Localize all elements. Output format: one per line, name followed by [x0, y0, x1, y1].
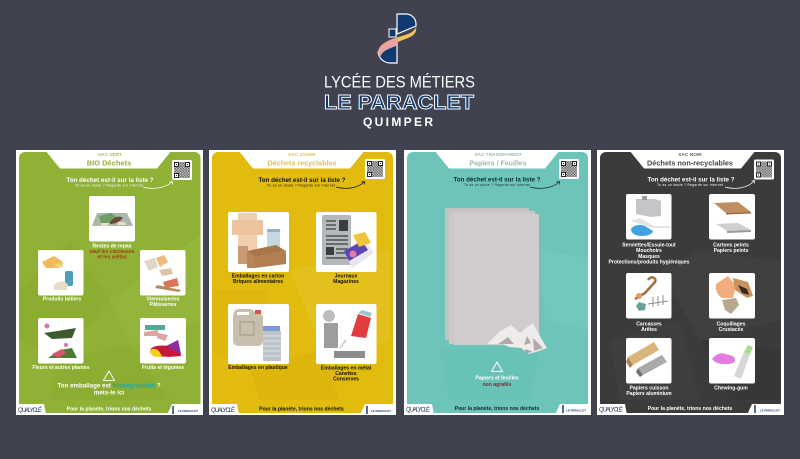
logo text: Lycée des Métiers: LYCÉE DES MÉTIERS — [324, 72, 475, 92]
panel: sac jaune — [209, 150, 396, 415]
header label: SAC TRANSPARENT — [474, 152, 522, 158]
logo text: Quimper: QUIMPER — [363, 115, 433, 129]
item: emballages en plastique — [228, 304, 289, 364]
hint: Tu as un doute ? Regarde sur internet — [75, 184, 143, 188]
header tab — [434, 150, 560, 168]
background polygons — [440, 250, 588, 400]
hint: Tu as un doute ? Regarde sur internet — [267, 184, 335, 188]
logo text: Le Paraclet: LE PARACLET — [324, 92, 474, 114]
footer: QUALYCLÉ — [18, 407, 42, 414]
label: carcasses: Arêtes — [641, 327, 657, 333]
label: fleurs et plantes: Fleurs et autres plantes — [32, 365, 90, 371]
footer: QUALYCLÉ — [211, 407, 235, 414]
footer: LE PARACLET — [371, 409, 391, 413]
warning message: non agrafés — [483, 382, 512, 388]
footer: Pour la planète, trions nos déchets — [455, 406, 539, 412]
footer: LE PARACLET — [178, 409, 198, 413]
warning message — [475, 376, 519, 388]
item: fruits et légumes — [140, 318, 186, 364]
item: serviettes — [626, 194, 672, 240]
footer: QUALYCLÉ — [406, 406, 430, 414]
header label: SAC VERT — [98, 152, 122, 158]
panel: sac transparent — [404, 150, 591, 415]
footer: Pour la planète, trions nos déchets — [259, 406, 344, 412]
footer: Pour la planète, trions nos déchets — [648, 406, 732, 412]
label: serviettes: Serviettes/Essuie-tout — [622, 242, 676, 248]
item: produits laitiers — [38, 250, 84, 296]
QR code — [172, 160, 192, 180]
icon: warning triangle — [492, 362, 502, 372]
label: cartons peints — [713, 242, 749, 254]
footer: QUALYCLÉ — [599, 406, 623, 414]
header tab — [629, 150, 756, 168]
footer — [597, 404, 784, 415]
label: produits laitiers: Produits laitiers — [43, 296, 81, 302]
icon: warning triangle — [104, 371, 114, 380]
panel: sac vert — [16, 150, 203, 415]
header title: BIO Déchets — [87, 158, 131, 168]
label: emballages en carton: Briques alimentaires — [233, 279, 283, 285]
label: coquillages: Crustacés — [719, 327, 743, 333]
QR code — [365, 159, 385, 179]
logo mark: letter P ribbon — [378, 14, 416, 63]
icon: crumpled paper — [487, 323, 547, 354]
question: Ton déchet est-il sur la liste ? — [648, 176, 735, 184]
label: emballages en plastique: Emballages en plastique — [228, 365, 288, 371]
label: restes de repas — [89, 244, 135, 260]
QR code — [754, 160, 774, 180]
item: fleurs et plantes — [38, 318, 84, 364]
item: carcasses — [626, 273, 672, 318]
item: papiers cuisson — [626, 338, 672, 384]
question: Ton déchet est-il sur la liste ? — [66, 177, 154, 184]
label: chewing-gum: Chewing-gum — [714, 386, 748, 392]
label: emballages en carton — [232, 274, 284, 285]
question: Ton déchet est-il sur la liste ? — [454, 176, 541, 184]
item: viennoiseries — [140, 250, 186, 296]
label: emballages en carton: Emballages en carton — [232, 274, 284, 280]
label: carcasses: Carcasses — [636, 322, 662, 328]
label: emballages en métal: Canettes — [335, 371, 357, 377]
footer: Pour la planète, trions nos déchets — [67, 406, 151, 412]
header tab — [45, 150, 172, 168]
item: restes de repas — [89, 196, 135, 242]
label: journaux — [333, 274, 359, 285]
label: serviettes: Protections/produits hygiéniques — [609, 260, 690, 266]
background polygons — [610, 250, 781, 400]
header title: Papiers / Feuilles — [469, 160, 527, 168]
header title: Déchets non-recyclables — [647, 158, 733, 168]
label: cartons peints: Papiers peints — [714, 248, 749, 254]
item: cartons peints — [709, 194, 755, 240]
biodegradable message — [57, 382, 161, 396]
header title: Déchets recyclables — [267, 158, 337, 168]
arrow — [530, 182, 560, 188]
footer: LE PARACLET — [760, 408, 780, 412]
label: serviettes: Mouchoirs — [636, 248, 662, 254]
label: emballages en métal: Emballages en métal — [321, 366, 372, 372]
label: coquillages: Coquillages — [717, 322, 746, 328]
biodegradable message: Ton emballage est biodégradable ? — [57, 382, 161, 390]
arrow — [725, 180, 754, 188]
label: restes de repas: et les arêtes — [97, 254, 127, 260]
item: emballages en carton — [228, 212, 289, 272]
icon: paper sheets — [445, 208, 539, 345]
footer: LE PARACLET — [566, 408, 586, 412]
warning message: Papiers et feuilles — [475, 376, 519, 382]
footer — [404, 404, 591, 415]
label: restes de repas: sauf les carcasses — [89, 249, 135, 255]
biodegradable message: mets-le ici — [94, 390, 124, 396]
label: restes de repas: Restes de repas — [92, 244, 132, 250]
hint: Tu as un doute ? Regarde sur internet — [657, 183, 723, 187]
QR code — [559, 159, 579, 179]
label: coquillages — [717, 322, 746, 333]
item: coquillages — [709, 273, 755, 318]
label: papiers cuisson — [626, 386, 672, 397]
question: Ton déchet est-il sur la liste ? — [258, 177, 346, 184]
label: emballages en métal: Conserves — [333, 376, 359, 382]
header label: SAC NOIR — [678, 152, 702, 158]
background polygons — [212, 250, 390, 400]
item: chewing-gum — [709, 338, 755, 384]
label: viennoiseries: Pâtisseries — [150, 302, 177, 308]
label: papiers cuisson: Papiers cuisson — [629, 386, 669, 392]
label: carcasses — [636, 322, 662, 333]
header label: SAC JAUNE — [288, 152, 317, 158]
label: journaux: Journaux — [335, 274, 358, 280]
item: emballages en métal — [316, 304, 376, 364]
footer — [209, 404, 396, 415]
arrow — [143, 182, 172, 188]
label: viennoiseries — [146, 296, 180, 308]
header tab — [238, 150, 365, 168]
label: serviettes — [609, 242, 690, 266]
label: papiers cuisson: Papiers aluminium — [626, 391, 672, 397]
label: cartons peints: Cartons peints — [713, 242, 749, 248]
label: fruits et légumes: Fruits et légumes — [142, 365, 184, 371]
footer — [16, 404, 203, 415]
item: journaux — [316, 212, 376, 272]
panel: sac noir — [597, 150, 784, 415]
label: serviettes: Masques — [638, 254, 660, 260]
hint: Tu as un doute ? Regarde sur internet — [464, 183, 530, 187]
label: emballages en métal — [321, 366, 372, 382]
arrow — [336, 182, 364, 188]
background polygons — [19, 235, 200, 400]
school logo — [324, 14, 475, 129]
label: viennoiseries: Viennoiseries — [146, 296, 180, 302]
label: journaux: Magazines — [333, 279, 359, 285]
